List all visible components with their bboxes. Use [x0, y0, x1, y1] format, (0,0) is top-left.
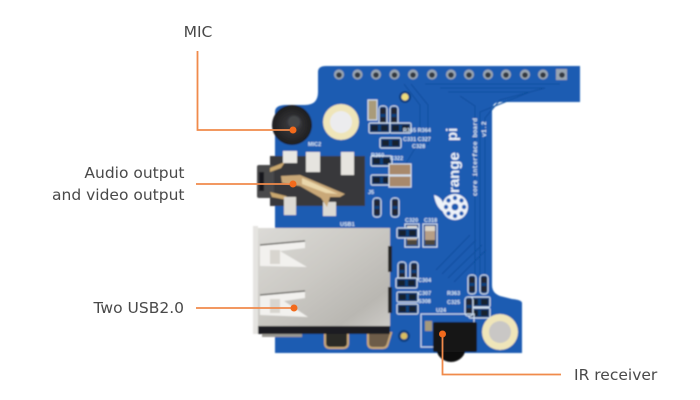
logo: orange pi: pi [444, 128, 461, 141]
silkscreen labels [308, 128, 460, 314]
silkscreen labels: J5 [368, 190, 374, 196]
via pad [399, 91, 411, 103]
header pins [334, 69, 567, 80]
silkscreen labels: C328 [412, 144, 425, 150]
board outline [275, 66, 580, 353]
mounting hole lower [482, 314, 518, 350]
logo: orange pi: core interface board [472, 118, 479, 196]
silkscreen labels: R363 [447, 291, 460, 297]
label: video output: and video output [52, 186, 184, 204]
label: MIC: MIC [184, 23, 212, 41]
callout: two USB2.0 [93, 299, 298, 317]
label: USB: Two USB2.0 [93, 299, 184, 317]
leader line: audio [196, 180, 296, 188]
silkscreen labels: R360 [371, 153, 384, 159]
silkscreen labels: C322 [390, 156, 403, 162]
circuit board [253, 66, 580, 362]
USB lower port [260, 291, 308, 317]
silkscreen labels: C331 C327 [403, 137, 431, 143]
silkscreen labels: S308 [418, 299, 431, 305]
logo: orange pi: range [446, 152, 463, 193]
USB connector [253, 226, 392, 348]
silkscreen labels: R365 R364 [403, 128, 432, 134]
SMD components [368, 100, 490, 318]
leader line: MIC [198, 51, 296, 134]
callout: IR receiver [439, 330, 658, 384]
microphone [272, 105, 312, 145]
callout: audio and video output [52, 164, 296, 204]
silkscreen labels: C307 [418, 291, 431, 297]
audio video jack [257, 151, 365, 216]
silkscreen labels: USB1 [340, 222, 355, 228]
USB upper port [260, 241, 307, 267]
IR receiver sensor [421, 314, 477, 362]
silkscreen labels: C318 [424, 218, 437, 224]
silkscreen labels: C304 [418, 278, 432, 284]
silkscreen labels: U24 [436, 308, 447, 314]
label: IR: IR receiver [574, 366, 658, 384]
copper traces [404, 84, 560, 290]
callout: MIC [184, 23, 296, 134]
leader line: IR [439, 330, 561, 374]
mounting hole upper [323, 104, 359, 140]
logo: orange pi: v1.2 [481, 121, 488, 137]
silkscreen labels: MIC2 [308, 142, 321, 148]
label: audio output: Audio output [84, 164, 184, 182]
silkscreen labels: C325 [447, 300, 460, 306]
logo: orange pi [434, 118, 488, 220]
silkscreen labels: C320 [405, 218, 418, 224]
leader line: USB [196, 304, 298, 312]
